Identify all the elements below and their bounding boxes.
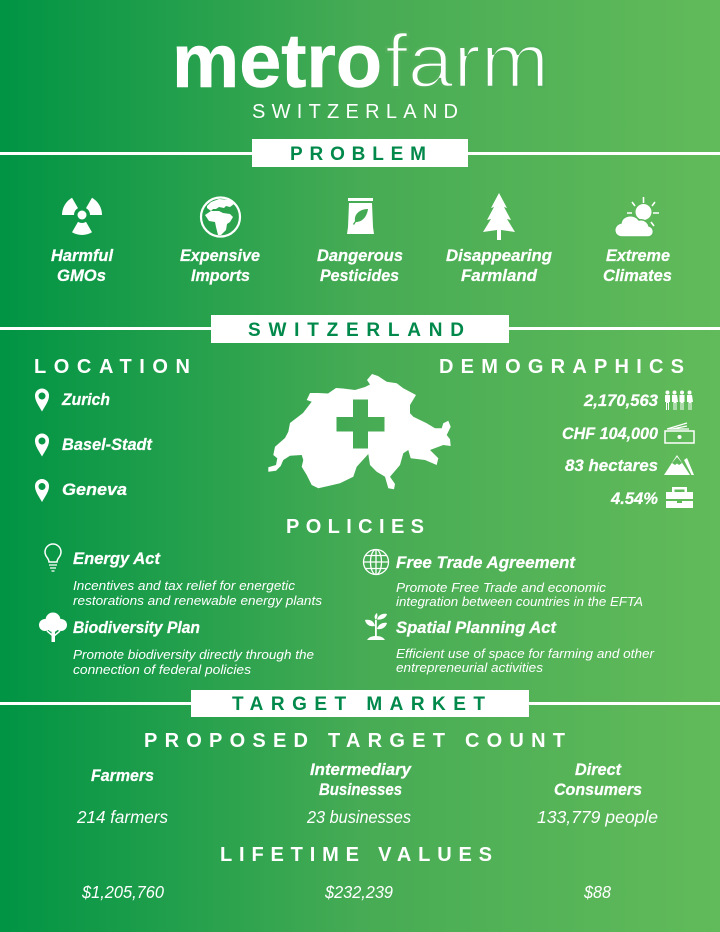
stat: farmland hectares: 83 hectares [565, 456, 658, 475]
stat: population: 2,170,563 [583, 391, 659, 410]
policy: Biodiversity Plan: Promote biodiversity directly through the [73, 647, 314, 662]
segment: direct consumers: Direct [575, 760, 622, 779]
policy: Biodiversity Plan: Biodiversity Plan [73, 618, 200, 637]
problem: disappearing farmland [446, 193, 553, 285]
policy: Free Trade Agreement: Promote Free Trade and economic [396, 580, 607, 595]
policy: Energy Act: restorations and renewable energy plants [73, 593, 323, 608]
segment: direct consumers [537, 760, 658, 827]
panel: problems [51, 193, 672, 285]
policy: Energy Act [45, 544, 323, 608]
panel: lifetime values: $1,205,760 [81, 882, 164, 902]
panel: demographics list [562, 390, 694, 508]
problem: extreme climates [603, 197, 672, 285]
segment: intermediary businesses [306, 760, 413, 827]
policy: Energy Act: Energy Act [73, 549, 161, 568]
segment: farmers: 214 farmers [76, 807, 168, 827]
problem: expensive imports: Imports [191, 266, 250, 285]
policy: Spatial Planning Act: Spatial Planning Act [396, 618, 557, 637]
segment: direct consumers: 133,779 people [537, 807, 658, 827]
problem: harmful GMOs [51, 198, 114, 285]
policy: Spatial Planning Act: entrepreneurial activities [396, 660, 544, 675]
policy: Energy Act: Incentives and tax relief for energetic [73, 578, 296, 593]
policy: Biodiversity Plan: connection of federal policies [73, 662, 252, 677]
panel: location list [35, 388, 153, 502]
problem: dangerous pesticides [317, 198, 403, 285]
section banner: switzerland: SWITZERLAND [248, 320, 464, 341]
heading: location: LOCATION [34, 356, 190, 378]
policy: Spatial Planning Act [365, 613, 655, 675]
title: metrofarm logo [172, 19, 549, 104]
segment: intermediary businesses: Businesses [319, 780, 402, 799]
stat: income: CHF 104,000 [562, 424, 659, 443]
problem: harmful GMOs: Harmful [51, 246, 114, 265]
problem: disappearing farmland: Disappearing [446, 246, 553, 265]
problem: expensive imports: Expensive [180, 246, 260, 265]
title: metrofarm logo: metro [172, 19, 382, 104]
section banner: target market [0, 690, 720, 717]
policy: Free Trade Agreement: integration between countries in the EFTA [396, 594, 643, 609]
problem: extreme climates: Climates [603, 266, 672, 285]
problem: dangerous pesticides: Dangerous [317, 246, 403, 265]
problem: disappearing farmland: Farmland [461, 266, 538, 285]
panel: lifetime values [81, 882, 611, 902]
panel: lifetime values: $88 [583, 882, 611, 902]
problem: dangerous pesticides: Pesticides [320, 266, 399, 285]
map: Switzerland with cross [268, 374, 451, 489]
policy: Free Trade Agreement [364, 550, 643, 609]
title: metrofarm logo: farm [385, 19, 549, 104]
section banner: target market: TARGET MARKET [232, 694, 485, 715]
heading: lifetime values: LIFETIME VALUES [220, 844, 492, 866]
location: Zurich: Zurich [61, 390, 110, 409]
section banner: problem [0, 139, 720, 167]
section banner: switzerland [0, 315, 720, 343]
segment: intermediary businesses: 23 businesses [306, 807, 411, 827]
problem: extreme climates: Extreme [606, 246, 670, 265]
segment: farmers [76, 766, 168, 827]
stat: unemployment: 4.54% [610, 489, 658, 508]
problem: expensive imports [180, 198, 260, 285]
problem: harmful GMOs: GMOs [57, 266, 106, 285]
section banner: problem: PROBLEM [290, 144, 426, 165]
location: Geneva: Geneva [62, 480, 127, 499]
panel: lifetime values: $232,239 [324, 882, 393, 902]
policy: Free Trade Agreement: Free Trade Agreement [396, 553, 576, 572]
segment: farmers: Farmers [91, 766, 154, 785]
heading: policies: POLICIES [286, 516, 424, 538]
panel: policies [39, 544, 655, 677]
panel: target segments [76, 760, 658, 827]
policy: Biodiversity Plan [39, 612, 314, 677]
segment: direct consumers: Consumers [554, 780, 642, 799]
policy: Spatial Planning Act: Efficient use of space for farming and other [396, 646, 655, 661]
heading: proposed target count: PROPOSED TARGET COUNT [144, 730, 565, 752]
location: Basel-Stadt: Basel-Stadt [62, 435, 153, 454]
heading: demographics: DEMOGRAPHICS [439, 356, 684, 378]
segment: intermediary businesses: Intermediary [310, 760, 413, 779]
subtitle: Switzerland: SWITZERLAND [252, 101, 458, 123]
